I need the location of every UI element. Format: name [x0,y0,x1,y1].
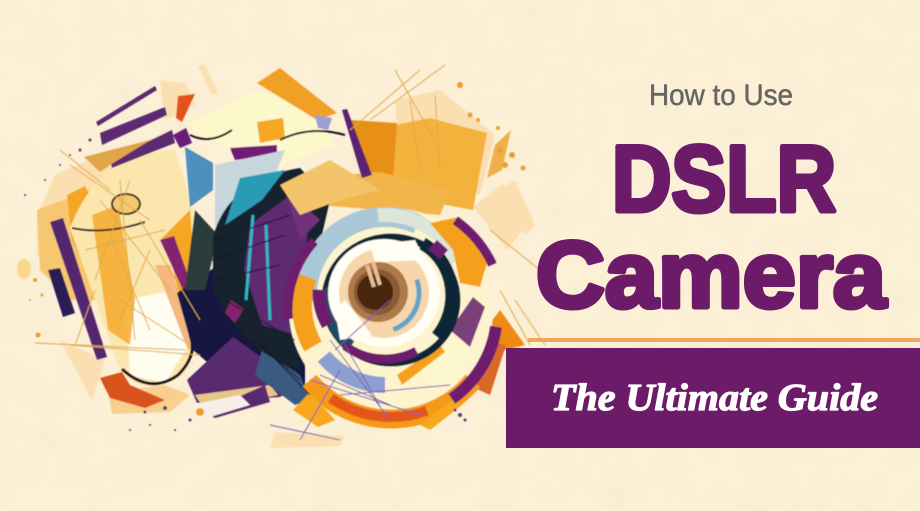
lens rings [235,156,547,468]
orange splash upper right [300,118,525,395]
camera grip body [70,150,196,408]
banner: The Ultimate Guide [506,348,920,448]
paint splatter dots [24,82,526,431]
outer orange ring [240,161,542,463]
sketch scratch lines [35,65,545,440]
banner: The Ultimate Guide: The Ultimate Guide [551,377,878,419]
pale paint washes behind camera [17,64,535,448]
orange inner ring pieces [272,192,498,418]
heading: Camera: Camera [536,222,887,327]
lens barrel [213,160,380,370]
camera top plate [185,68,372,178]
camera blue shoulder [185,147,285,235]
purple strips on left side [48,86,195,360]
dark base of camera [177,210,310,420]
white inner lens [328,239,440,347]
heading: How to Use: How to Use [649,79,793,112]
left orange paint block [37,185,120,340]
heading: DSLR: DSLR [612,126,836,231]
illustration: painted camera [17,64,547,468]
orange divider line [528,338,920,342]
blue hatch ring [300,210,470,380]
dark ring [305,211,477,385]
purple ring segments [235,156,547,468]
